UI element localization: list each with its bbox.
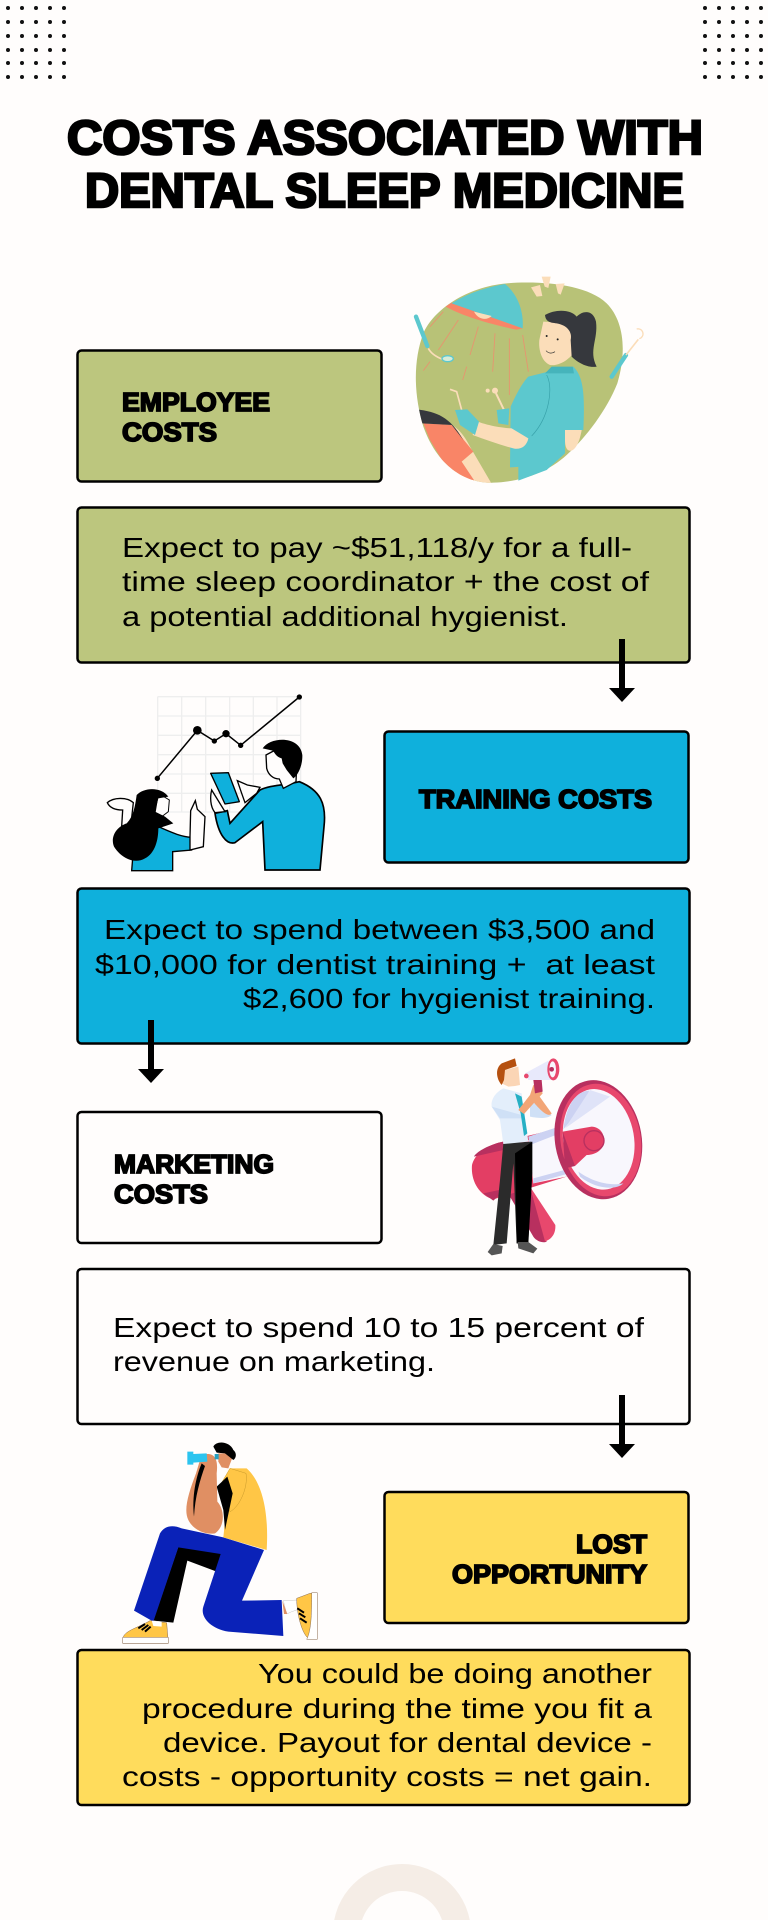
panel: training costs label: TRAINING COSTS: [419, 784, 652, 814]
decorative dot grid: top left: [6, 6, 66, 79]
panel: employee costs label: EMPLOYEE: [122, 387, 270, 417]
panel: lost opportunity label: OPPORTUNITY: [452, 1559, 647, 1589]
panel: employee costs label: COSTS: [122, 417, 217, 447]
panel: training costs description: $10,000 for dentist training + at least: [95, 949, 655, 980]
panel: employee costs description: time sleep coordinator + the cost of: [122, 566, 649, 597]
illustration: two people reviewing chart: [107, 694, 325, 871]
illustration: dentist at work: [416, 277, 643, 487]
panel: employee costs description: a potential additional hygienist.: [122, 601, 568, 632]
panel: lost opportunity description: device. Payout for dental device -: [163, 1727, 652, 1758]
illustration: man with binoculars: [123, 1443, 317, 1643]
arrow: to training costs: [609, 639, 635, 702]
panel: lost opportunity description: You could be doing another: [258, 1658, 652, 1689]
panel: training costs description: Expect to spend between $3,500 and: [104, 914, 655, 945]
panel: lost opportunity description: procedure during the time you fit a: [142, 1693, 652, 1724]
title: COSTS ASSOCIATED WITH: [67, 112, 703, 165]
title: [67, 112, 703, 218]
title: DENTAL SLEEP MEDICINE: [85, 165, 684, 218]
panel: marketing costs label: [78, 1112, 382, 1243]
arrow: to lost opportunity: [609, 1395, 635, 1458]
illustration: man with megaphone: [472, 1058, 651, 1255]
panel: marketing costs description: [78, 1269, 690, 1424]
decorative dot grid: top right: [703, 6, 763, 79]
panel: lost opportunity label: LOST: [576, 1529, 647, 1559]
decorative arc at bottom: [346, 1878, 458, 1920]
panel: training costs description: [78, 888, 690, 1044]
panel: training costs label: [384, 732, 688, 862]
panel: marketing costs label: MARKETING: [114, 1149, 274, 1179]
panel: marketing costs description: Expect to spend 10 to 15 percent of: [113, 1312, 644, 1343]
panel: lost opportunity description: costs - opportunity costs = net gain.: [122, 1761, 652, 1792]
panel: training costs description: $2,600 for hygienist training.: [243, 983, 655, 1014]
panel: employee costs description: [78, 508, 690, 662]
panel: marketing costs label: COSTS: [114, 1179, 208, 1209]
panel: lost opportunity label: [384, 1492, 688, 1623]
panel: employee costs label: [78, 350, 382, 482]
panel: marketing costs description: revenue on marketing.: [113, 1346, 435, 1377]
panel: employee costs description: Expect to pay ~$51,118/y for a full-: [122, 532, 632, 563]
panel: lost opportunity description: [78, 1650, 690, 1805]
arrow: to marketing costs: [138, 1020, 164, 1083]
